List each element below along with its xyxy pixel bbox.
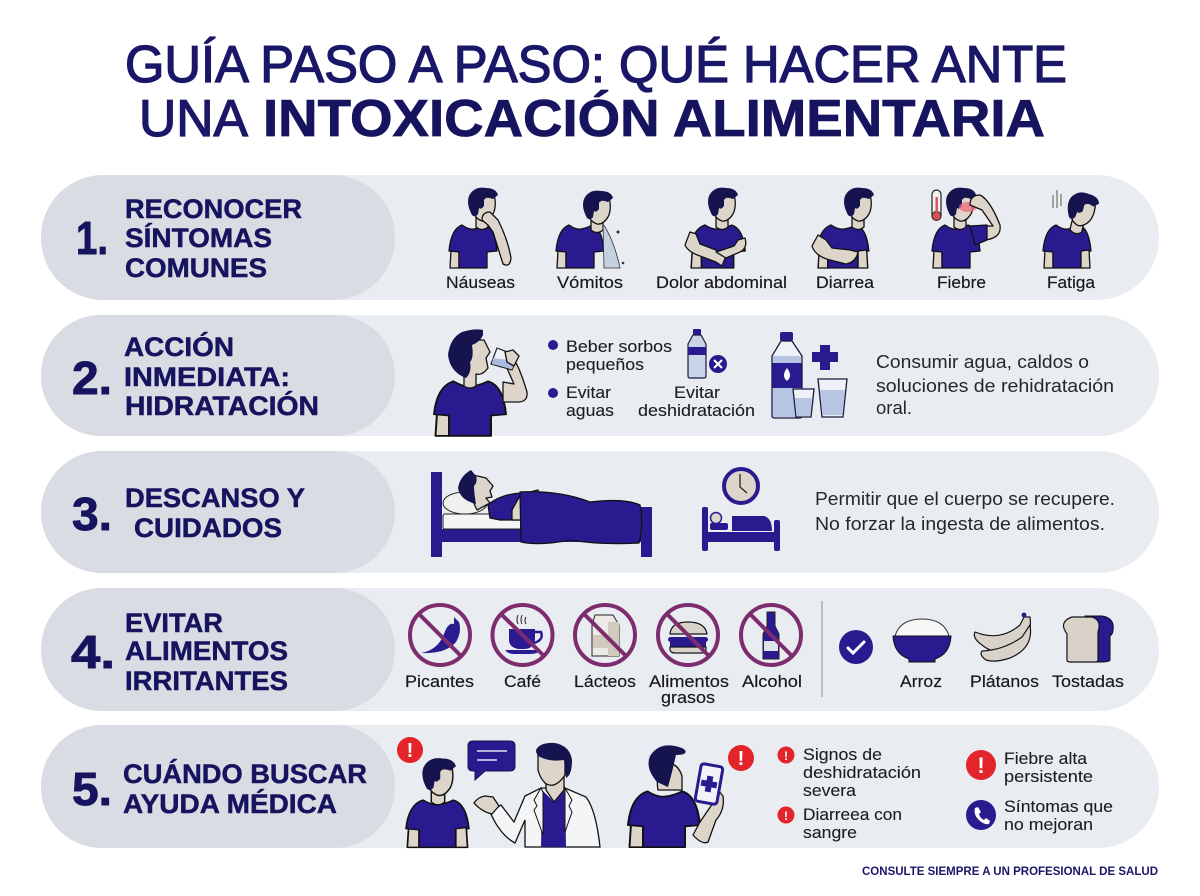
label: rice: Arroz	[900, 673, 942, 691]
text: rest advice: Permitir que el cuerpo se recupere.	[815, 489, 1115, 509]
step 2 heading: 2.	[72, 352, 112, 404]
icon: fever with thermometer	[932, 188, 1000, 268]
panel: step 5 seek medical help	[41, 725, 1159, 848]
icon: doctor	[474, 743, 600, 847]
warning list: severe dehydration, blood: !	[784, 749, 788, 763]
warning: symptoms not improving	[966, 797, 1113, 834]
icon: alert: !	[738, 748, 744, 770]
icon: diarrhoea	[812, 188, 874, 268]
icon: patient with phone	[628, 745, 723, 847]
list: hydration tips: Beber sorbos	[566, 337, 672, 356]
icon: water bottle, glasses and plus	[772, 332, 847, 418]
icon: rice bowl	[893, 619, 951, 662]
warning: persistent high fever	[966, 749, 1093, 786]
text: rest advice: No forzar la ingesta de alimentos.	[815, 514, 1105, 534]
icon: no fatty foods	[658, 605, 718, 665]
icon: man drinking water	[434, 329, 527, 436]
text: rest advice	[815, 489, 1115, 534]
step 4 heading: IRRITANTES	[125, 666, 288, 696]
label: toast: Tostadas	[1052, 673, 1124, 691]
list: hydration tips: pequeños	[566, 355, 644, 374]
icon: bananas	[974, 612, 1031, 661]
warning list: severe dehydration, blood	[778, 745, 921, 842]
label: vomiting: Vómitos	[557, 274, 623, 292]
label: fatty foods: Alimentos	[649, 673, 729, 691]
warning: persistent high fever: !	[977, 753, 985, 778]
warning: symptoms not improving: Síntomas que	[1004, 797, 1113, 816]
icon: alert	[728, 745, 754, 771]
step 5 heading: AYUDA MÉDICA	[123, 788, 337, 819]
icon: small crossed bottle	[688, 329, 727, 378]
step 2 heading	[41, 315, 395, 436]
title: INTOXICACIÓN ALIMENTARIA	[263, 90, 1045, 148]
icon: person resting in bed	[431, 470, 652, 557]
icon: nausea	[449, 188, 511, 268]
text: hydration advice	[876, 352, 1114, 418]
label: fatty foods: grasos	[661, 689, 715, 707]
icon: no coffee	[492, 605, 552, 665]
step 1 heading: 1.	[76, 212, 108, 264]
step 1 heading: RECONOCER	[125, 194, 302, 224]
step 4 heading: EVITAR	[125, 608, 223, 638]
icon: alert: !	[407, 740, 413, 762]
list: hydration tips: Evitar	[674, 383, 720, 402]
step 1 heading: COMUNES	[125, 253, 267, 283]
step 2 heading: ACCIÓN	[124, 331, 234, 362]
panel: step 3 rest	[41, 451, 1159, 573]
icon: abdominal pain	[685, 188, 746, 268]
label: fatty foods	[649, 673, 729, 707]
icon: no dairy	[575, 605, 635, 665]
text: hydration advice: Consumir agua, caldos o	[876, 352, 1089, 372]
list: hydration tips: Evitar	[566, 383, 611, 402]
label: bananas: Plátanos	[970, 673, 1039, 691]
title	[125, 36, 1067, 148]
title: GUÍA PASO A PASO: QUÉ HACER ANTE	[125, 36, 1067, 94]
list: hydration tips: deshidratación	[638, 401, 755, 420]
warning list: severe dehydration, blood: Diarreea con	[803, 805, 902, 824]
icon: fatigue	[1043, 189, 1101, 268]
warning: persistent high fever: persistente	[1004, 767, 1093, 786]
label: coffee: Café	[504, 673, 541, 691]
panel: step 2 hydration	[41, 315, 1159, 436]
step 5 heading: 5.	[72, 763, 112, 815]
warning: symptoms not improving: no mejoran	[1004, 815, 1093, 834]
step 1 heading: SÍNTOMAS	[125, 222, 272, 253]
step 2 heading: INMEDIATA:	[124, 362, 290, 392]
step 1 heading	[41, 175, 395, 300]
icon: no alcohol	[741, 605, 801, 665]
icon: patient	[406, 758, 469, 847]
label: alcohol: Alcohol	[742, 673, 802, 691]
step 2 heading: HIDRATACIÓN	[125, 390, 319, 421]
step 4 heading: ALIMENTOS	[125, 636, 288, 666]
step 4 heading	[41, 588, 395, 711]
icon: check mark	[839, 630, 873, 664]
panel: step 1 recognise symptoms	[41, 175, 1159, 300]
step 3 heading: CUIDADOS	[134, 513, 282, 543]
icon: clock and bed	[702, 469, 780, 551]
warning list: severe dehydration, blood: sangre	[803, 823, 857, 842]
icon: speech bubble	[468, 741, 515, 780]
panel: step 4 foods	[41, 588, 1159, 711]
list: hydration tips: aguas	[566, 401, 614, 420]
step 4 heading: 4.	[71, 626, 115, 678]
warning list: severe dehydration, blood: Signos de	[803, 745, 882, 764]
list: hydration tips	[548, 337, 755, 420]
icon: toast	[1063, 616, 1113, 662]
text: hydration advice: oral.	[876, 398, 912, 418]
label: abdominal pain: Dolor abdominal	[656, 274, 787, 292]
icon: vomiting	[556, 191, 624, 268]
step 3 heading	[41, 451, 395, 573]
text: hydration advice: soluciones de rehidratación	[876, 376, 1114, 396]
warning list: severe dehydration, blood: !	[784, 809, 788, 823]
label: fever: Fiebre	[937, 274, 986, 292]
step 3 heading: 3.	[72, 488, 112, 540]
icon: alert	[397, 737, 423, 763]
icon: no spicy food	[410, 605, 470, 665]
step 3 heading: DESCANSO Y	[125, 483, 305, 513]
warning list: severe dehydration, blood: deshidratación	[803, 763, 921, 782]
warning: persistent high fever: Fiebre alta	[1004, 749, 1088, 768]
footer note: CONSULTE SIEMPRE A UN PROFESIONAL DE SALUD	[862, 866, 1158, 878]
label: spicy: Picantes	[405, 673, 474, 691]
step 5 heading: CUÁNDO BUSCAR	[123, 758, 367, 789]
step 5 heading	[41, 725, 395, 848]
label: dairy: Lácteos	[574, 673, 636, 691]
label: diarrhoea: Diarrea	[816, 274, 875, 292]
label: nausea: Náuseas	[446, 274, 515, 292]
title: UNA	[139, 90, 248, 148]
warning list: severe dehydration, blood: severa	[803, 781, 857, 800]
label: fatigue: Fatiga	[1047, 274, 1096, 292]
